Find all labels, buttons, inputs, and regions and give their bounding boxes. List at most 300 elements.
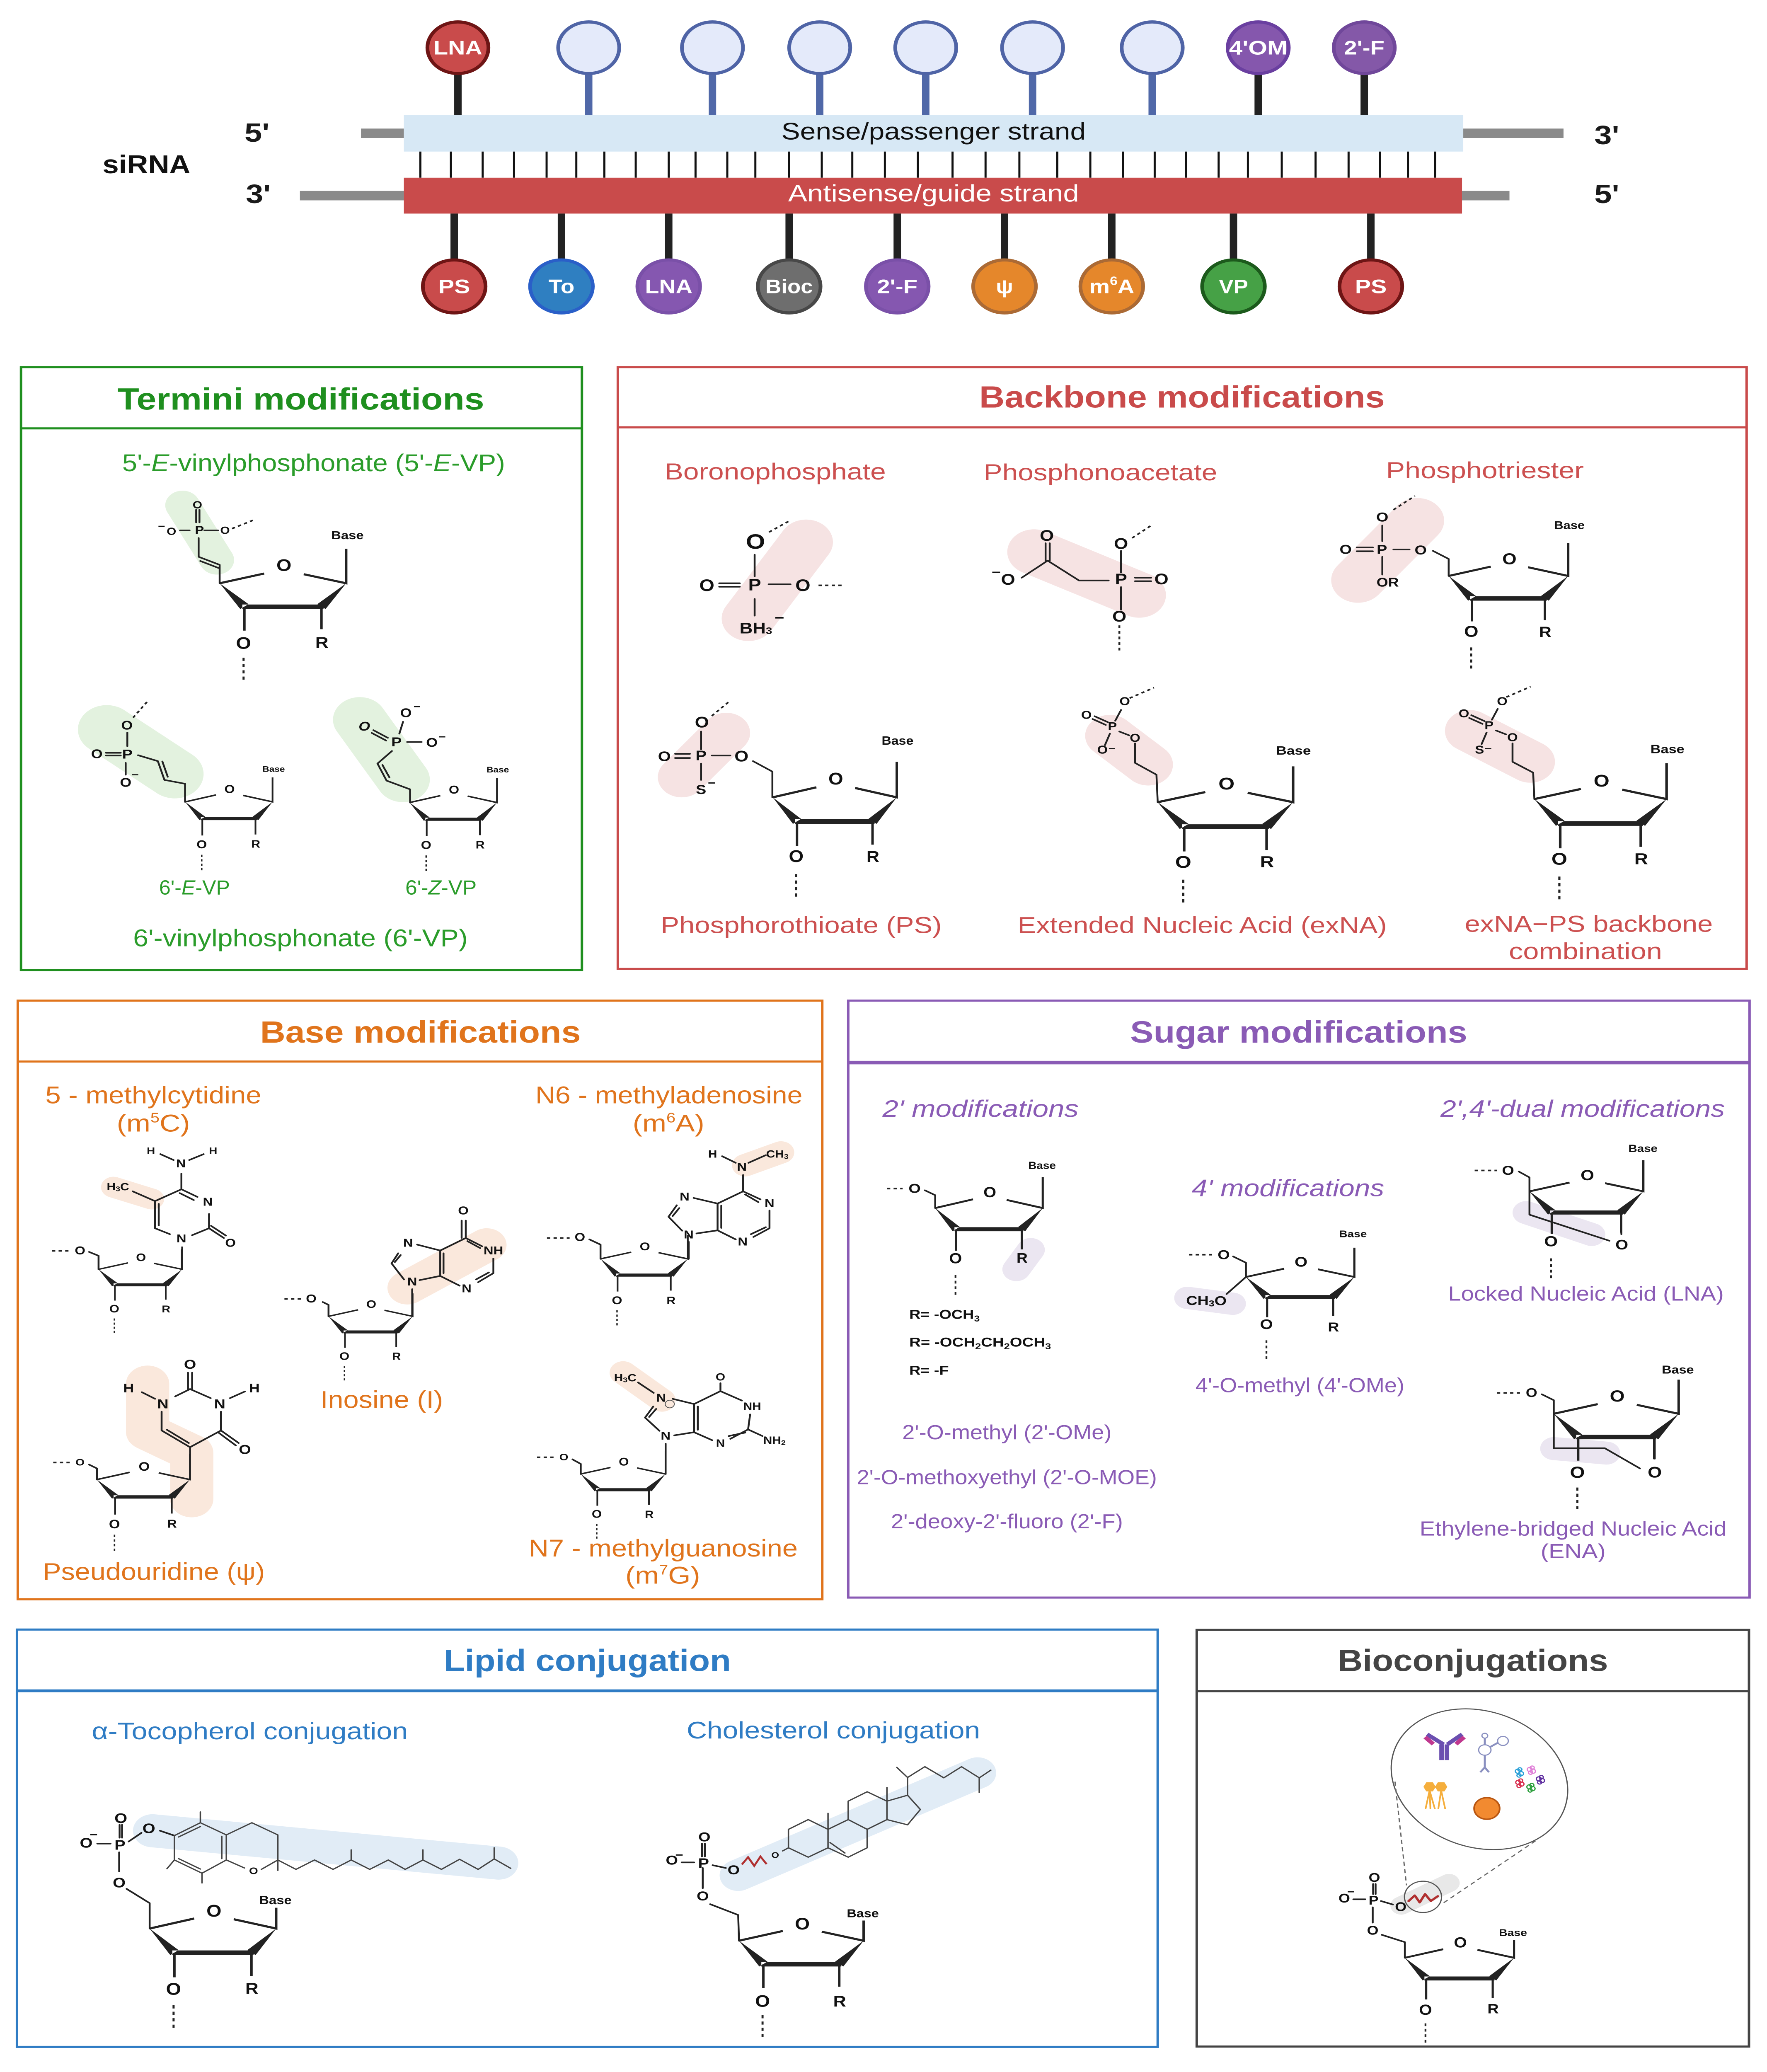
structure: phosphonoacetate: − <box>992 565 1001 580</box>
structure: 4'-O-methyl: Base <box>1339 1229 1367 1239</box>
structure: extended nucleic acid: O <box>1218 774 1234 793</box>
structure: extended nucleic acid: O <box>1130 732 1140 744</box>
R group list: 3 <box>1045 1341 1051 1351</box>
label: 5-methylcytidine: 5 <box>150 1110 160 1126</box>
structure: 6'-Z-VP: Base <box>487 765 509 775</box>
structure: exNA-PS combination: P <box>1484 719 1493 732</box>
structure: bioconjugate nucleotide: O <box>1367 1924 1378 1938</box>
structure: 5-methylcytidine: H <box>209 1146 217 1156</box>
heading: lipid: Lipid conjugation <box>444 1644 731 1678</box>
label: 2' modification names: 2'-O-methyl (2'-OMe) <box>902 1421 1111 1444</box>
label: ENA <box>1420 1518 1727 1563</box>
heading: sugar: Sugar modifications <box>1130 1016 1467 1050</box>
structure: boronophosphate: O <box>746 530 765 553</box>
structure: bioconjugate nucleotide: Base <box>1499 1927 1527 1939</box>
zoom callout ellipse <box>1358 1680 1600 1878</box>
structure: N7-methylguanosine: O <box>716 1371 725 1383</box>
structure: N7-methylguanosine: N <box>656 1392 666 1404</box>
structure: 5-methylcytidine: N <box>176 1157 186 1170</box>
structure: bioconjugate nucleotide <box>1339 1871 1527 2045</box>
label: tocopherol: α-Tocopherol conjugation <box>92 1718 408 1745</box>
structure: 5-methylcytidine: C <box>120 1181 129 1192</box>
structure: bioconjugate nucleotide: O <box>1369 1871 1380 1885</box>
structure: exNA-PS combination: Base <box>1651 742 1685 756</box>
structure: cholesterol conjugate: O <box>728 1863 740 1878</box>
structure: locked nucleic acid: O <box>1502 1163 1514 1178</box>
structure: inosine: N <box>407 1276 417 1288</box>
structure: N6-methyladenosine: O <box>640 1240 650 1253</box>
label: 6'-VP: 6'-vinylphosphonate (6'-VP) <box>133 925 468 951</box>
structure: cholesterol conjugate: O <box>772 1850 779 1860</box>
structure: 5'-E-vinylphosphonate: R <box>315 634 329 651</box>
structure: cholesterol conjugate: O <box>697 1889 709 1904</box>
structure: boronophosphate: O <box>795 576 811 595</box>
structure: 6'-Z-VP: − <box>438 731 446 743</box>
structure: exNA-PS combination: O <box>1594 771 1610 790</box>
structure: phosphonoacetate: O <box>1001 571 1015 588</box>
icon: antibody <box>1425 1734 1464 1760</box>
structure: 4'-O-methyl: CH <box>1186 1293 1209 1308</box>
structure: 5-methylcytidine: O <box>75 1244 85 1257</box>
structure: cholesterol conjugate: − <box>675 1849 683 1861</box>
lower marker labels: VP <box>1219 276 1248 298</box>
structure: N6-methyladenosine: N <box>680 1191 690 1203</box>
zoom guide lines <box>1395 1782 1535 1904</box>
strand end labels: 5' <box>244 118 269 148</box>
structure: pseudouridine: O <box>239 1442 251 1457</box>
strand end labels <box>244 118 1619 209</box>
structure: 4'-O-methyl: O <box>1215 1293 1227 1308</box>
structure: phosphonoacetate: O <box>1040 527 1054 544</box>
structure: boronophosphate: P <box>748 576 761 594</box>
strand end labels: 3' <box>246 179 271 209</box>
structure: alpha-tocopherol conjugate: Base <box>259 1893 292 1907</box>
structure: alpha-tocopherol conjugate: − <box>90 1829 97 1841</box>
structure: 6'-E-VP: O <box>225 783 235 796</box>
structure: N6-methyladenosine: H <box>708 1148 717 1160</box>
structure: pseudouridine: O <box>184 1357 196 1372</box>
label: 6'-Z-VP: 6'-Z-VP <box>405 877 477 899</box>
sense strand label: Sense/passenger strand <box>781 118 1086 145</box>
label: N6-methyladenosine: N6 - methyladenosine <box>535 1081 802 1109</box>
structure: bioconjugate nucleotide: P <box>1369 1894 1378 1908</box>
structure: phosphorothioate: O <box>658 748 671 764</box>
structure: extended nucleic acid: O <box>1119 695 1130 708</box>
structure: N6-methyladenosine: CH <box>766 1148 784 1160</box>
antisense strand bar <box>404 178 1462 213</box>
structure: bioconjugate nucleotide: O <box>1339 1892 1350 1905</box>
structure: 5-methylcytidine: O <box>109 1303 119 1315</box>
structure: boronophosphate: 3 <box>766 626 772 636</box>
structure: phosphonoacetate <box>992 525 1169 651</box>
label: ENA: (ENA) <box>1541 1540 1606 1563</box>
structure: alpha-tocopherol conjugate <box>80 1811 511 2031</box>
structure: alpha-tocopherol conjugate: R <box>245 1980 259 1997</box>
structure: inosine: NH <box>484 1244 503 1257</box>
structure: locked nucleic acid: Base <box>1628 1143 1658 1154</box>
structure: bioconjugate nucleotide: R <box>1487 2002 1499 2016</box>
label: LNA: Locked Nucleic Acid (LNA) <box>1448 1283 1724 1305</box>
label: 2' modification names: 2'-deoxy-2'-fluoro (2'-F) <box>891 1510 1123 1533</box>
structure: extended nucleic acid <box>1081 687 1311 905</box>
icon: proteins <box>1515 1766 1544 1792</box>
lower marker labels: ψ <box>996 276 1013 298</box>
label: N7-methylguanosine: (m <box>625 1562 659 1589</box>
label: pseudouridine: Pseudouridine (ψ) <box>43 1558 265 1585</box>
label: 5-methylcytidine <box>46 1081 261 1137</box>
structure: 5-methylcytidine: H <box>107 1181 116 1192</box>
upper marker labels <box>433 37 1385 59</box>
structure: 5'-E-vinylphosphonate: O <box>236 634 251 653</box>
lower marker labels: Bioc <box>765 276 813 298</box>
structure: 6'-E-VP: R <box>251 838 260 850</box>
lower marker labels: A <box>1118 276 1134 298</box>
structure: 4'-O-methyl: O <box>1260 1317 1273 1332</box>
structure: ethylene-bridged nucleic acid <box>1497 1364 1694 1512</box>
structure: 4'-O-methyl: O <box>1218 1247 1230 1262</box>
structure: inosine <box>284 1205 503 1382</box>
structure: locked nucleic acid <box>1475 1143 1658 1280</box>
structure: 4'-O-methyl <box>1186 1229 1367 1361</box>
structure: inosine: O <box>458 1205 469 1217</box>
strand end labels: 5' <box>1594 179 1619 209</box>
structure: phosphotriester: O <box>1339 542 1352 557</box>
structure: phosphonoacetate: O <box>1112 608 1126 625</box>
label: boronophosphate: Boronophosphate <box>665 459 886 484</box>
lower marker labels: PS <box>1355 276 1387 298</box>
R group list: OCH <box>1010 1335 1045 1350</box>
structure: phosphorothioate: Base <box>882 734 913 747</box>
structure: pseudouridine: N <box>214 1397 225 1411</box>
structure: N6-methyladenosine: O <box>575 1231 585 1244</box>
structure: N6-methyladenosine: O <box>612 1294 622 1307</box>
structure: 5'-E-vinylphosphonate: O <box>167 525 176 537</box>
structure: alpha-tocopherol conjugate: O <box>113 1875 126 1890</box>
structure: alpha-tocopherol conjugate: P <box>114 1837 126 1853</box>
structure: phosphonoacetate: O <box>1114 535 1128 552</box>
label: N7-methylguanosine: G) <box>668 1562 700 1589</box>
structure: inosine: N <box>462 1283 472 1295</box>
label: 5-methylcytidine: 5 - methylcytidine <box>46 1081 261 1109</box>
structure: cholesterol conjugate: R <box>833 1993 846 2010</box>
structure: pseudouridine: O <box>109 1517 120 1531</box>
structure: 5-methylcytidine <box>52 1146 236 1335</box>
structure: extended nucleic acid: O <box>1175 852 1191 871</box>
R group list: R= -F <box>909 1363 949 1378</box>
structure: phosphorothioate: R <box>867 847 879 865</box>
structure: 5'-E-vinylphosphonate <box>158 499 364 683</box>
structure: exNA-PS combination: O <box>1459 707 1469 720</box>
base pair lines <box>420 152 1435 178</box>
structure: N6-methyladenosine: N <box>684 1229 694 1241</box>
structure: 6'-Z-VP: P <box>391 735 402 749</box>
lower marker labels: To <box>549 276 574 298</box>
structure: N6-methyladenosine: N <box>765 1197 775 1210</box>
structure: phosphonoacetate: P <box>1115 570 1127 588</box>
structure: phosphotriester: O <box>1502 550 1517 568</box>
structure: 5'-E-vinylphosphonate: O <box>276 557 291 575</box>
structure: cholesterol conjugate: O <box>755 1992 770 2010</box>
structure: ethylene-bridged nucleic acid: O <box>1570 1463 1585 1481</box>
structure: boronophosphate: BH <box>740 620 766 637</box>
structure: N7-methylguanosine: N <box>661 1430 670 1442</box>
structure: locked nucleic acid: O <box>1544 1233 1558 1249</box>
structure: exNA-PS combination: O <box>1507 731 1518 744</box>
structure: phosphorothioate: − <box>708 777 716 789</box>
lower marker labels: 6 <box>1110 274 1118 288</box>
R group list: R= -OCH <box>909 1307 974 1322</box>
panel: sugar modifications <box>848 1001 1750 1598</box>
structure: 6'-Z-VP: R <box>476 838 485 851</box>
structure: bioconjugate nucleotide: O <box>1419 2002 1432 2018</box>
structure: cholesterol conjugate <box>666 1767 991 2040</box>
structure: phosphotriester <box>1339 496 1585 671</box>
heading: termini: Termini modifications <box>117 382 484 416</box>
structure: exNA-PS combination: O <box>1497 695 1508 708</box>
heading: backbone: Backbone modifications <box>979 380 1385 414</box>
structure: 6'-Z-VP: O <box>358 720 370 733</box>
structure: 6'-E-VP: O <box>91 747 103 761</box>
icon: orange sphere <box>1474 1798 1500 1819</box>
label: extended nucleic acid: Extended Nucleic Acid (exNA) <box>1018 912 1387 938</box>
heading: bioconjugations: Bioconjugations <box>1338 1644 1608 1678</box>
structure: 5'-E-vinylphosphonate: Base <box>331 529 364 542</box>
lower marker labels: m <box>1089 276 1110 298</box>
structure: inosine: R <box>392 1351 401 1362</box>
label: 5'-E-VP: 5'-E-vinylphosphonate (5'-E-VP) <box>122 449 505 477</box>
label: N7-methylguanosine <box>529 1535 798 1589</box>
structure: 4'-O-methyl: O <box>1295 1254 1307 1270</box>
structure: N7-methylguanosine: O <box>619 1456 629 1468</box>
structure: 6'-E-VP <box>91 701 285 872</box>
structure: phosphonoacetate: O <box>1155 570 1169 588</box>
structure: 5-methylcytidine: H <box>147 1146 155 1156</box>
structure: 2' ribose: O <box>908 1181 921 1196</box>
structure: N7-methylguanosine: NH <box>763 1434 781 1446</box>
antisense strand label: Antisense/guide strand <box>788 180 1079 207</box>
structure: phosphorothioate <box>658 702 913 900</box>
panel: base modifications <box>18 1001 822 1599</box>
structure: 2' ribose <box>887 1159 1056 1297</box>
sense strand bar <box>404 115 1463 152</box>
structure: 6'-Z-VP: O <box>400 706 412 720</box>
structure: 4'-O-methyl: 3 <box>1209 1299 1215 1308</box>
structure: phosphorothioate: O <box>828 770 843 788</box>
structure: phosphotriester: Base <box>1554 519 1585 532</box>
label: 4' modifications: 4' modifications <box>1192 1175 1384 1201</box>
structure: pseudouridine: N <box>157 1397 169 1411</box>
structure: boronophosphate <box>700 520 844 637</box>
structure: alpha-tocopherol conjugate: O <box>80 1835 92 1851</box>
label: exNA-PS combination: combination <box>1509 938 1662 964</box>
lower marker labels: PS <box>438 276 470 298</box>
upper blue lollipop stems <box>589 74 1152 115</box>
structure: cholesterol conjugate: P <box>698 1855 709 1871</box>
structure: exNA-PS combination: R <box>1634 850 1648 868</box>
label: ENA: Ethylene-bridged Nucleic Acid <box>1420 1518 1727 1540</box>
structure: extended nucleic acid: R <box>1260 853 1274 871</box>
structure: 5-methylcytidine: 3 <box>116 1185 120 1193</box>
icon: aptamer <box>1479 1733 1508 1772</box>
structure: phosphotriester: O <box>1414 543 1427 557</box>
structure: N7-methylguanosine: 2 <box>781 1438 786 1446</box>
label: inosine: Inosine (I) <box>320 1386 443 1413</box>
structure: phosphorothioate: O <box>695 714 709 731</box>
lower marker labels: LNA <box>645 276 692 298</box>
structure: N7-methylguanosine: N <box>716 1437 725 1449</box>
structure: inosine: O <box>306 1293 317 1305</box>
structure: N6-methyladenosine: 3 <box>784 1152 789 1160</box>
panel: bioconjugations <box>1197 1630 1749 2047</box>
structure: alpha-tocopherol conjugate: O <box>206 1902 221 1920</box>
structure: 6'-Z-VP: O <box>449 784 459 796</box>
structure: 6'-E-VP: Base <box>262 765 285 774</box>
label: phosphonoacetate: Phosphonoacetate <box>984 460 1217 485</box>
structure: N7-methylguanosine: O <box>592 1508 602 1520</box>
structure: N7-methylguanosine <box>537 1371 786 1540</box>
structure: N7-methylguanosine: R <box>645 1508 654 1520</box>
structure: extended nucleic acid: O <box>1097 744 1108 756</box>
structure: 6'-Z-VP: − <box>414 701 421 712</box>
structure: phosphorothioate: O <box>789 847 804 866</box>
structure: 5-methylcytidine: R <box>162 1303 170 1315</box>
structure: phosphotriester: O <box>1464 623 1478 640</box>
strand end labels: 3' <box>1594 121 1619 150</box>
structure: 6'-Z-VP <box>358 701 509 873</box>
structure: pseudouridine: O <box>139 1460 150 1473</box>
structure: alpha-tocopherol conjugate: O <box>166 1980 181 1999</box>
structure: phosphorothioate: O <box>734 748 748 765</box>
structure: exNA-PS combination <box>1459 687 1685 902</box>
structure: cholesterol conjugate: O <box>795 1915 810 1933</box>
structure: 5'-E-vinylphosphonate: P <box>195 524 204 537</box>
lower lollipop stems <box>454 213 1371 259</box>
label: N7-methylguanosine: 7 <box>659 1562 668 1578</box>
structure: 6'-E-VP: O <box>196 838 207 851</box>
R group list: 2 <box>975 1341 981 1351</box>
structure: phosphotriester: R <box>1539 624 1552 640</box>
lower modification markers <box>423 260 1402 313</box>
structure: cholesterol conjugate: O <box>666 1853 678 1868</box>
structure: inosine: N <box>403 1237 413 1249</box>
siRNA duplex diagram <box>102 22 1619 313</box>
label: exNA-PS combination <box>1465 911 1713 964</box>
structure: ethylene-bridged nucleic acid: O <box>1526 1386 1537 1400</box>
structure: boronophosphate: O <box>700 576 714 595</box>
label: phosphorothioate: Phosphorothioate (PS) <box>661 912 942 938</box>
structure: N6-methyladenosine: N <box>737 1161 747 1173</box>
label: N6-methyladenosine: 6 <box>666 1110 675 1126</box>
upper marker labels: 4'OM <box>1229 37 1288 59</box>
R group list <box>909 1307 1051 1378</box>
upper marker labels: LNA <box>433 37 482 59</box>
label: N6-methyladenosine: A) <box>675 1110 704 1137</box>
structure: locked nucleic acid: O <box>1581 1167 1594 1184</box>
structure: boronophosphate: − <box>775 610 784 625</box>
structure: 6'-E-VP: O <box>121 719 133 733</box>
structure: 5'-E-vinylphosphonate: O <box>193 499 202 511</box>
structure: phosphorothioate: S <box>696 782 706 797</box>
structure: bioconjugate nucleotide: O <box>1395 1900 1406 1914</box>
structure: 5'-E-vinylphosphonate: − <box>158 520 165 532</box>
structure: N7-methylguanosine: H <box>614 1372 623 1383</box>
siRNA label: siRNA <box>102 150 190 179</box>
label: cholesterol: Cholesterol conjugation <box>687 1717 980 1744</box>
structure: phosphorothioate: P <box>696 748 707 763</box>
structure: cholesterol conjugate: O <box>698 1830 710 1844</box>
label: exNA-PS combination: exNA−PS backbone <box>1465 911 1713 937</box>
icon: lipid tails <box>1423 1782 1447 1809</box>
structure: 2' ribose: Base <box>1028 1159 1056 1172</box>
structure: ethylene-bridged nucleic acid: O <box>1610 1387 1625 1405</box>
structure: pseudouridine: O <box>75 1457 85 1468</box>
structure: exNA-PS combination: O <box>1552 849 1567 869</box>
structure: phosphotriester: OR <box>1377 576 1399 590</box>
R group list: R= -OCH <box>909 1335 974 1350</box>
R group list: 3 <box>974 1314 980 1324</box>
structure: inosine: O <box>366 1298 376 1311</box>
structure: extended nucleic acid: P <box>1108 721 1117 733</box>
structure: pseudouridine <box>53 1357 260 1553</box>
structure: phosphotriester: P <box>1377 542 1387 557</box>
structure: locked nucleic acid: O <box>1615 1237 1628 1252</box>
structure: 5-methylcytidine: N <box>203 1196 213 1208</box>
structure: 5-methylcytidine: O <box>225 1237 236 1249</box>
structure: 6'-E-VP: O <box>120 776 131 790</box>
structure: N7-methylguanosine: C <box>627 1372 637 1383</box>
label: 5-methylcytidine: C) <box>160 1110 190 1137</box>
structure: N6-methyladenosine <box>547 1148 789 1327</box>
heading: base: Base modifications <box>260 1016 581 1050</box>
structure: 4'-O-methyl: R <box>1328 1320 1339 1334</box>
lower marker labels: 2'-F <box>877 276 917 298</box>
structure: extended nucleic acid: − <box>1109 743 1116 755</box>
structure: 6'-E-VP: P <box>122 747 133 762</box>
structure: ethylene-bridged nucleic acid: Base <box>1662 1364 1694 1376</box>
label: 5-methylcytidine: (m <box>117 1110 150 1137</box>
label: N6-methyladenosine: (m <box>633 1110 666 1137</box>
structure: cholesterol conjugate: Base <box>847 1907 879 1920</box>
structure: bioconjugate nucleotide: − <box>1347 1886 1355 1898</box>
structure: alpha-tocopherol conjugate: O <box>114 1811 127 1826</box>
structure: 2' ribose: O <box>983 1184 996 1200</box>
structure: 6'-Z-VP: O <box>426 736 438 750</box>
panel: termini modifications <box>21 367 582 970</box>
lower marker labels <box>438 274 1387 298</box>
structure: pseudouridine: H <box>249 1381 260 1395</box>
R group list: CH <box>981 1335 1004 1350</box>
structure: exNA-PS combination: S <box>1475 744 1484 756</box>
structure: N6-methyladenosine: R <box>666 1295 675 1306</box>
upper lollipop stems <box>458 74 1364 115</box>
structure: alpha-tocopherol conjugate: O <box>143 1820 155 1836</box>
structure: pseudouridine: H <box>123 1381 134 1395</box>
structure: 5'-E-vinylphosphonate: O <box>220 525 230 536</box>
structure: extended nucleic acid: Base <box>1276 744 1311 757</box>
upper modification markers <box>427 22 1395 73</box>
structure: inosine: O <box>339 1350 349 1363</box>
upper marker labels: 2'-F <box>1344 37 1385 59</box>
structure: 2' ribose: O <box>949 1250 962 1266</box>
panel: lipid conjugation <box>17 1629 1158 2047</box>
structure: 6'-E-VP: − <box>131 769 139 781</box>
label: 2' modification names: 2'-O-methoxyethyl (2'-O-MOE) <box>857 1466 1157 1489</box>
label: 2' modification names <box>857 1421 1157 1533</box>
structure: 2' ribose: R <box>1017 1251 1028 1266</box>
label: 4'-OMe: 4'-O-methyl (4'-OMe) <box>1196 1375 1404 1397</box>
structure: 5-methylcytidine: N <box>177 1232 186 1245</box>
structure: N7-methylguanosine: NH <box>743 1400 761 1412</box>
